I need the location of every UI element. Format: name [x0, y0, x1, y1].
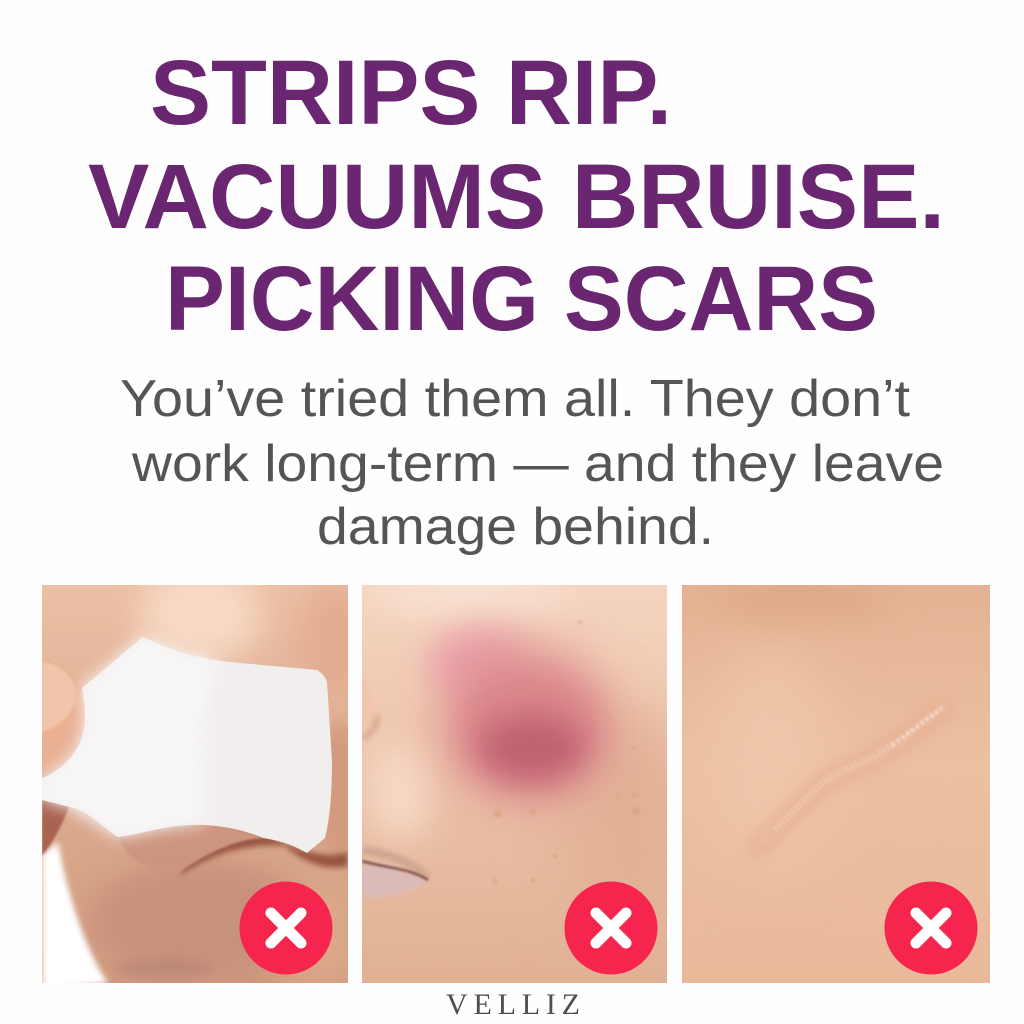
- subtitle: work long-term — and they leave: [131, 435, 944, 493]
- freckles: [492, 620, 640, 884]
- panel: bruised cheek: [362, 585, 667, 983]
- icon: red X badge two: [564, 882, 658, 974]
- icon: pore strip: [42, 637, 332, 853]
- finger underside: [42, 800, 70, 855]
- strip light side: [42, 637, 215, 837]
- nose tip: [118, 825, 263, 872]
- title: PICKING SCARS: [165, 248, 878, 350]
- thumb: [43, 664, 74, 773]
- right nose wing: [326, 720, 348, 851]
- scar highlight ridges: [775, 745, 892, 830]
- title: VACUUMS BRUISE.: [88, 146, 945, 248]
- scar halo: [757, 707, 944, 848]
- brand name: VELLIZ: [446, 988, 580, 1021]
- scar body: [762, 707, 944, 842]
- skin tone variation: [735, 665, 805, 802]
- lip shadow: [120, 960, 206, 976]
- bruise: dark core: [477, 714, 587, 782]
- bruise: mid tone: [458, 667, 602, 783]
- panel: pore strip on nose: [42, 585, 348, 983]
- title: [88, 42, 945, 350]
- icon: red X badge three: [884, 882, 978, 974]
- subtitle: damage behind.: [317, 498, 714, 556]
- strip grain: [42, 637, 332, 853]
- lower face tone: [94, 858, 282, 970]
- title: STRIPS RIP.: [150, 42, 672, 144]
- nose edge: [364, 682, 366, 689]
- nose bridge highlight: [131, 585, 268, 663]
- mouth corner crease: [362, 850, 428, 878]
- thumbnail: [42, 662, 76, 732]
- subtitle: [120, 370, 944, 556]
- lower right cheek tone: [566, 702, 667, 888]
- panel: scar on skin: [682, 580, 990, 983]
- icon: red X badge one: [240, 882, 332, 974]
- bruise: outer pink: [428, 627, 528, 703]
- white backdrop beside the face: [42, 842, 108, 990]
- lips: [362, 862, 428, 897]
- skin grain: [362, 585, 667, 983]
- top highlight: [384, 585, 556, 619]
- subtitle: You’ve tried them all. They don’t: [120, 370, 911, 428]
- nostril shadow: [180, 826, 348, 875]
- skin grain: [682, 585, 990, 983]
